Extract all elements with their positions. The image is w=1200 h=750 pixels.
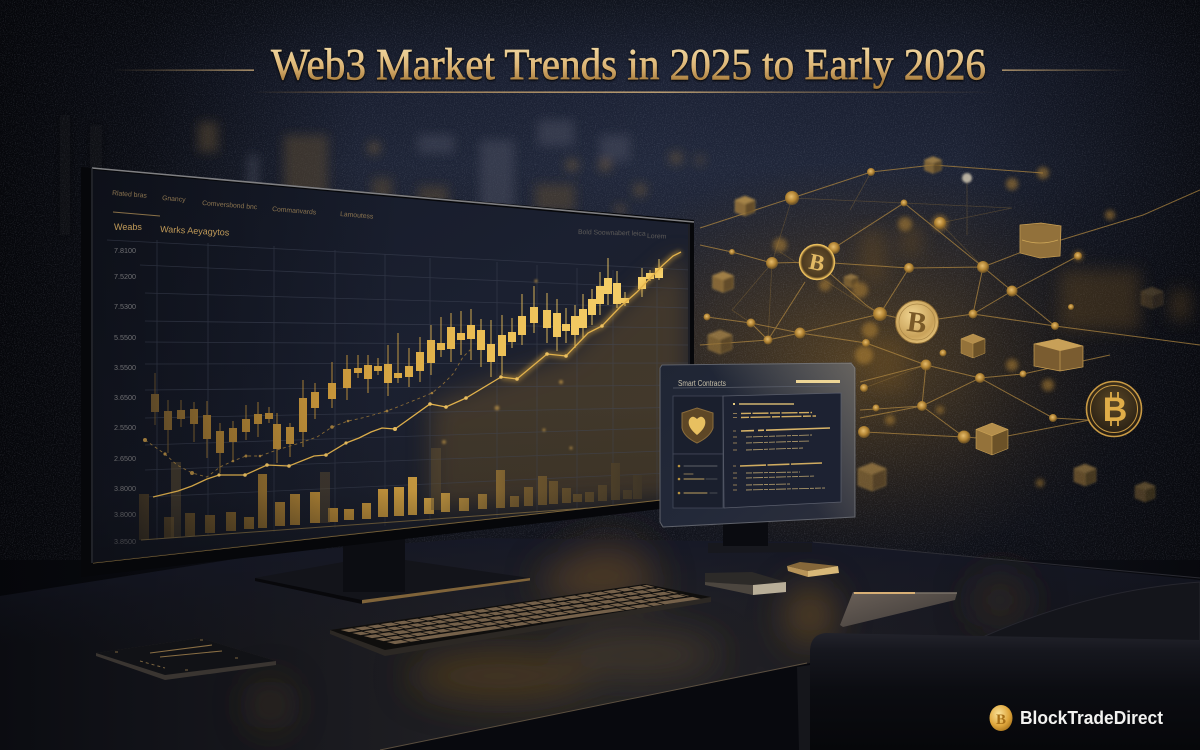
main trend line glow	[501, 252, 681, 379]
screen header text: Gnancy	[162, 195, 186, 204]
y axis labels: 7.5200	[114, 272, 136, 281]
y axis labels: 7.5300	[114, 302, 136, 311]
office chair	[797, 582, 1200, 750]
volume bars	[139, 463, 642, 540]
blurred city lights	[60, 115, 704, 235]
tablet on desk	[96, 638, 276, 680]
logo coin	[990, 705, 1012, 731]
desk warm reflections	[250, 538, 1030, 729]
screen header text: Bold Soownabert leica	[578, 229, 646, 238]
screen header text: Commanvards	[272, 206, 317, 217]
bitcoin coin: centre	[896, 300, 938, 344]
logo coin: B	[996, 712, 1006, 728]
panel frames	[673, 393, 841, 508]
tall ghost volume bars	[171, 448, 441, 537]
secondary stand behind panel	[708, 520, 812, 553]
main trend line	[153, 252, 681, 497]
candlestick bodies	[151, 268, 663, 453]
y axis labels: 3.5500	[114, 363, 136, 372]
screen heading tabs: Warks Aeyagytos	[160, 224, 230, 238]
keyboard	[330, 584, 711, 656]
keys	[345, 586, 697, 643]
blurred background cubes	[708, 156, 1163, 502]
title underline	[250, 92, 1000, 93]
bitcoin coin: right: B	[1103, 391, 1127, 429]
screen header text	[112, 190, 667, 241]
shield heart icon	[682, 408, 713, 443]
logo wordmark: BlockTradeDirect	[1020, 708, 1163, 728]
grid lines	[107, 240, 690, 540]
screen header text: Lamoutess	[340, 211, 374, 221]
warm glow under trend	[430, 252, 688, 510]
grey distant node	[962, 173, 972, 183]
y axis labels	[114, 246, 136, 546]
cube: top right	[1020, 223, 1061, 258]
screen header text: Rlated bras	[112, 190, 148, 200]
y axis labels: 2.5500	[114, 423, 136, 432]
bitcoin coin: right	[1086, 382, 1142, 436]
bitcoin coin: centre: B	[905, 306, 929, 340]
bitcoin coin: upper left	[800, 244, 834, 280]
cube: lower	[976, 423, 1008, 455]
network nodes	[704, 168, 1082, 444]
y axis labels: 7.8100	[114, 246, 136, 255]
y axis labels: 2.6500	[114, 454, 136, 463]
screen heading tabs: Weabs	[114, 222, 142, 232]
blurred warm windows	[860, 225, 1190, 390]
title text: Web3 Market Trends in 2025 to Early 2026	[271, 40, 986, 89]
title left rule	[112, 70, 254, 71]
secondary dotted trend line	[143, 348, 472, 477]
bitcoin coin: upper left: B	[807, 249, 827, 276]
gold card on desk	[787, 562, 839, 577]
logo: BlockTradeDirect	[990, 705, 1163, 731]
smart contracts panel	[660, 363, 855, 527]
trading chart on screen	[93, 170, 690, 570]
book on desk	[705, 572, 786, 595]
candlestick wicks	[155, 258, 659, 473]
network connection lines	[700, 165, 1200, 439]
desk	[0, 538, 1200, 750]
cube: open box	[1034, 339, 1083, 371]
chart base line	[141, 506, 596, 540]
panel header bar	[796, 380, 840, 383]
screen header text: Lorem	[647, 233, 667, 241]
screen heading tabs	[113, 212, 230, 238]
chart floating sparks	[442, 279, 573, 450]
panel left list	[678, 465, 717, 494]
panel code lines	[733, 404, 830, 490]
y axis labels: 5.5500	[114, 333, 136, 342]
network glow nodes	[773, 167, 1115, 487]
screen header text: Comversbond bnc	[202, 200, 258, 211]
monitor	[81, 167, 694, 577]
blockchain network	[700, 156, 1200, 502]
y axis labels: 3.8000	[114, 510, 136, 519]
y axis labels: 3.8000	[114, 484, 136, 493]
title right rule	[1002, 70, 1132, 71]
y axis labels: 3.6500	[114, 393, 136, 402]
cube: small centre	[961, 334, 985, 358]
panel title: Smart Contracts	[678, 379, 726, 388]
paper sheet on desk	[840, 592, 957, 627]
monitor stand	[255, 530, 530, 604]
y axis labels: 3.8500	[114, 537, 136, 546]
